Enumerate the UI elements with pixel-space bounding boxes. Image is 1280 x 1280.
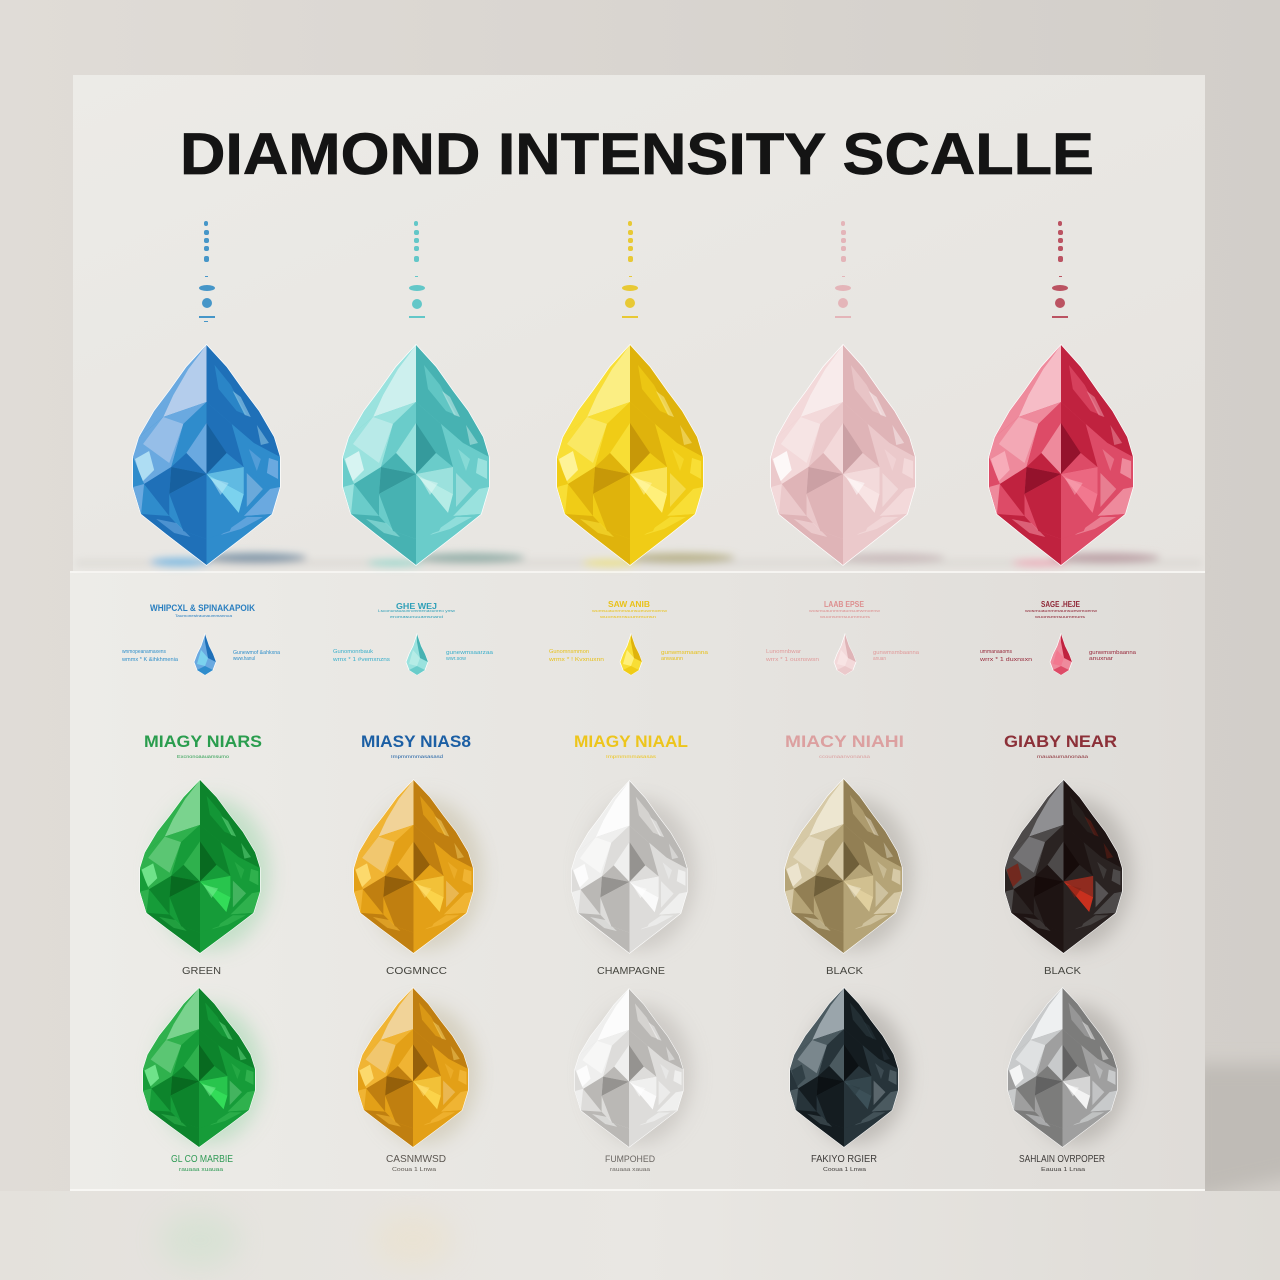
side notes <box>332 649 494 663</box>
header text <box>150 603 255 618</box>
side notes: wrrx * 1 duxnsxn <box>979 657 1032 663</box>
side notes: anwaunn <box>661 656 683 662</box>
header text: eromasunuuamsnand <box>390 614 443 619</box>
small drop <box>406 634 428 675</box>
panel shadow on wall <box>1190 1064 1280 1200</box>
heading: navy: Impmmmmasasasd <box>391 754 444 759</box>
captions: row 2 <box>171 1154 1105 1173</box>
drip scale <box>1052 221 1068 318</box>
header text: Lsconunauaunrommenaxunreo ymw <box>378 608 455 613</box>
heading: dark red: GIABY NEAR <box>1004 733 1117 751</box>
drip scale <box>622 221 638 318</box>
side notes: gunwmsmbaanna <box>873 650 920 656</box>
side notes <box>548 649 709 663</box>
side notes: wwr.sow <box>445 656 466 662</box>
caption: silver variant <box>1019 1154 1105 1173</box>
row headings <box>144 733 1117 759</box>
caption: cognac variant: Cooua 1 Lnwa <box>392 1167 436 1173</box>
caption: white variant: rauaaa xauaa <box>610 1167 650 1173</box>
column: yellow gem group <box>548 221 709 675</box>
column: blue gem group <box>121 221 281 675</box>
caption: champagne: CHAMPAGNE <box>597 966 665 977</box>
caption: silver variant: Eauua 1 Lnaa <box>1041 1167 1085 1173</box>
gem: cognac, row 2 <box>358 988 468 1147</box>
caption: green: GREEN <box>182 966 221 977</box>
title: DIAMOND INTENSITY SCALLE <box>180 122 1094 187</box>
heading: green: Excnonoaauamsumo <box>177 754 230 759</box>
header text: LAAB EPSE <box>824 600 865 609</box>
gem: green, row 1 <box>140 780 260 953</box>
heading: green <box>144 733 262 759</box>
column: red gem group <box>979 221 1137 675</box>
gem: tan, row 1 <box>785 779 902 953</box>
caption: cognac: COGMNCC <box>386 966 447 977</box>
panel: lower board <box>70 571 1205 1191</box>
drip scale <box>199 221 215 322</box>
gem: blue diamond <box>133 345 280 565</box>
side notes: ummanaaoms <box>980 649 1012 655</box>
gem: red diamond <box>989 345 1133 565</box>
panel: upper board <box>73 75 1205 573</box>
header text: wosmuaunmmaunsuewmoenw <box>1025 608 1097 613</box>
gem: white, row 1 <box>572 781 687 953</box>
heading: pink: ccoumaanvonanaa <box>819 754 871 759</box>
header text <box>378 601 455 619</box>
heading: pink <box>785 733 904 759</box>
gem: black and red, row 1 <box>1005 780 1122 953</box>
side notes: gunwmsmaanna <box>661 650 709 656</box>
heading: gold <box>574 733 688 759</box>
header text: wuonsmnsuummuns <box>820 614 870 619</box>
caption: black: BLACK <box>826 966 863 977</box>
side notes: Lunomnbwar <box>766 649 801 655</box>
header text <box>1025 600 1097 619</box>
column: teal gem group <box>332 221 494 675</box>
header text: wuonsmnsuummuns <box>1035 614 1085 619</box>
caption: green marble: GL CO MARBIE <box>171 1154 233 1165</box>
ledge shadows under top gems <box>76 553 1202 566</box>
side notes <box>979 649 1137 663</box>
side notes: wrrx * 1 ouxnswsn <box>765 657 819 663</box>
caption: cognac variant <box>386 1154 446 1173</box>
heading: navy: MIASY NIAS8 <box>361 733 471 751</box>
header text: wuonsmnsuummunsn <box>600 614 656 619</box>
header text: WHIPCXL & SPINAKAPOIK <box>150 603 255 613</box>
heading: pink: MIACY NIAHI <box>785 733 904 751</box>
gem shadows: lower rows <box>154 798 1132 1144</box>
small drop <box>834 634 856 675</box>
side notes: wnmopeanamaxens <box>121 649 166 655</box>
heading: navy <box>361 733 471 759</box>
caption: cognac variant: CASNMWSD <box>386 1154 446 1165</box>
gem: yellow diamond <box>557 345 703 565</box>
side notes: anuxnar <box>1089 656 1113 662</box>
side notes: Gunomonrbauk <box>333 649 373 655</box>
side notes <box>765 649 920 663</box>
gem: teal diamond <box>343 345 489 565</box>
side notes: Gunomnsmmon <box>549 649 589 655</box>
side notes: www.hanul <box>232 656 255 662</box>
side notes: gunewmsaarzaa <box>446 650 494 656</box>
small drop <box>1050 634 1072 675</box>
side notes: anuan <box>873 656 886 662</box>
caption: white variant: FUMPOHED <box>605 1154 655 1164</box>
header text <box>809 600 880 619</box>
small drop <box>620 634 642 675</box>
gem: cognac, row 1 <box>354 780 473 953</box>
side notes: wrnx * 1 #vemxnzns <box>332 657 390 663</box>
caption: black variant: FAKIYO RGIER <box>811 1154 877 1165</box>
header text <box>592 600 667 619</box>
caption: silver variant: SAHLAIN OVRPOPER <box>1019 1154 1105 1165</box>
caption: black: BLACK <box>1044 966 1081 977</box>
header text: Taumonestraunaummannoa <box>175 613 233 618</box>
header text: SAW ANIB <box>608 600 650 609</box>
caption: white variant <box>605 1154 655 1173</box>
small drop <box>194 634 216 675</box>
header text: GHE WEJ <box>396 601 437 611</box>
gem: pink diamond <box>771 345 915 565</box>
gem: silver, row 2 <box>1008 988 1117 1147</box>
drip scale <box>835 221 851 318</box>
header text: wosmuaunmmaunsuewmoenw <box>809 608 880 613</box>
caption: green marble <box>171 1154 233 1173</box>
gem: white, row 2 <box>575 989 683 1147</box>
heading: dark red: mauaaumanonaaa <box>1037 754 1089 759</box>
side notes <box>121 649 281 663</box>
side notes: gunwmsmbaanna <box>1089 650 1137 656</box>
heading: green: MIAGY NIARS <box>144 733 262 751</box>
gem: green, row 2 <box>143 988 255 1147</box>
captions: row 1 <box>182 966 1081 977</box>
floor <box>0 1191 1280 1280</box>
heading: gold: Impmmmmasasas <box>606 754 657 759</box>
caption: green marble: rauaaa xuauaa <box>179 1167 223 1173</box>
caption: black variant: Cooua 1 Lnwa <box>823 1167 866 1173</box>
side notes: Gunewmof &ahkxna <box>233 650 281 656</box>
caption: black variant <box>811 1154 877 1173</box>
side notes: wmmx * K &ihkhmenia <box>121 657 179 663</box>
column: pink gem group <box>765 221 920 675</box>
header text: wumsuaunmmaunsueuwmoenw <box>592 608 667 613</box>
gem: black, row 2 <box>790 988 898 1147</box>
side notes: wrmx * ! Kvxnuxnn <box>548 657 604 663</box>
drip scale <box>409 221 425 318</box>
heading: dark red <box>1004 733 1117 759</box>
heading: gold: MIAGY NIAAL <box>574 733 688 751</box>
header text: SAGE .HEJE <box>1041 600 1081 609</box>
floor reflection <box>160 1212 453 1268</box>
